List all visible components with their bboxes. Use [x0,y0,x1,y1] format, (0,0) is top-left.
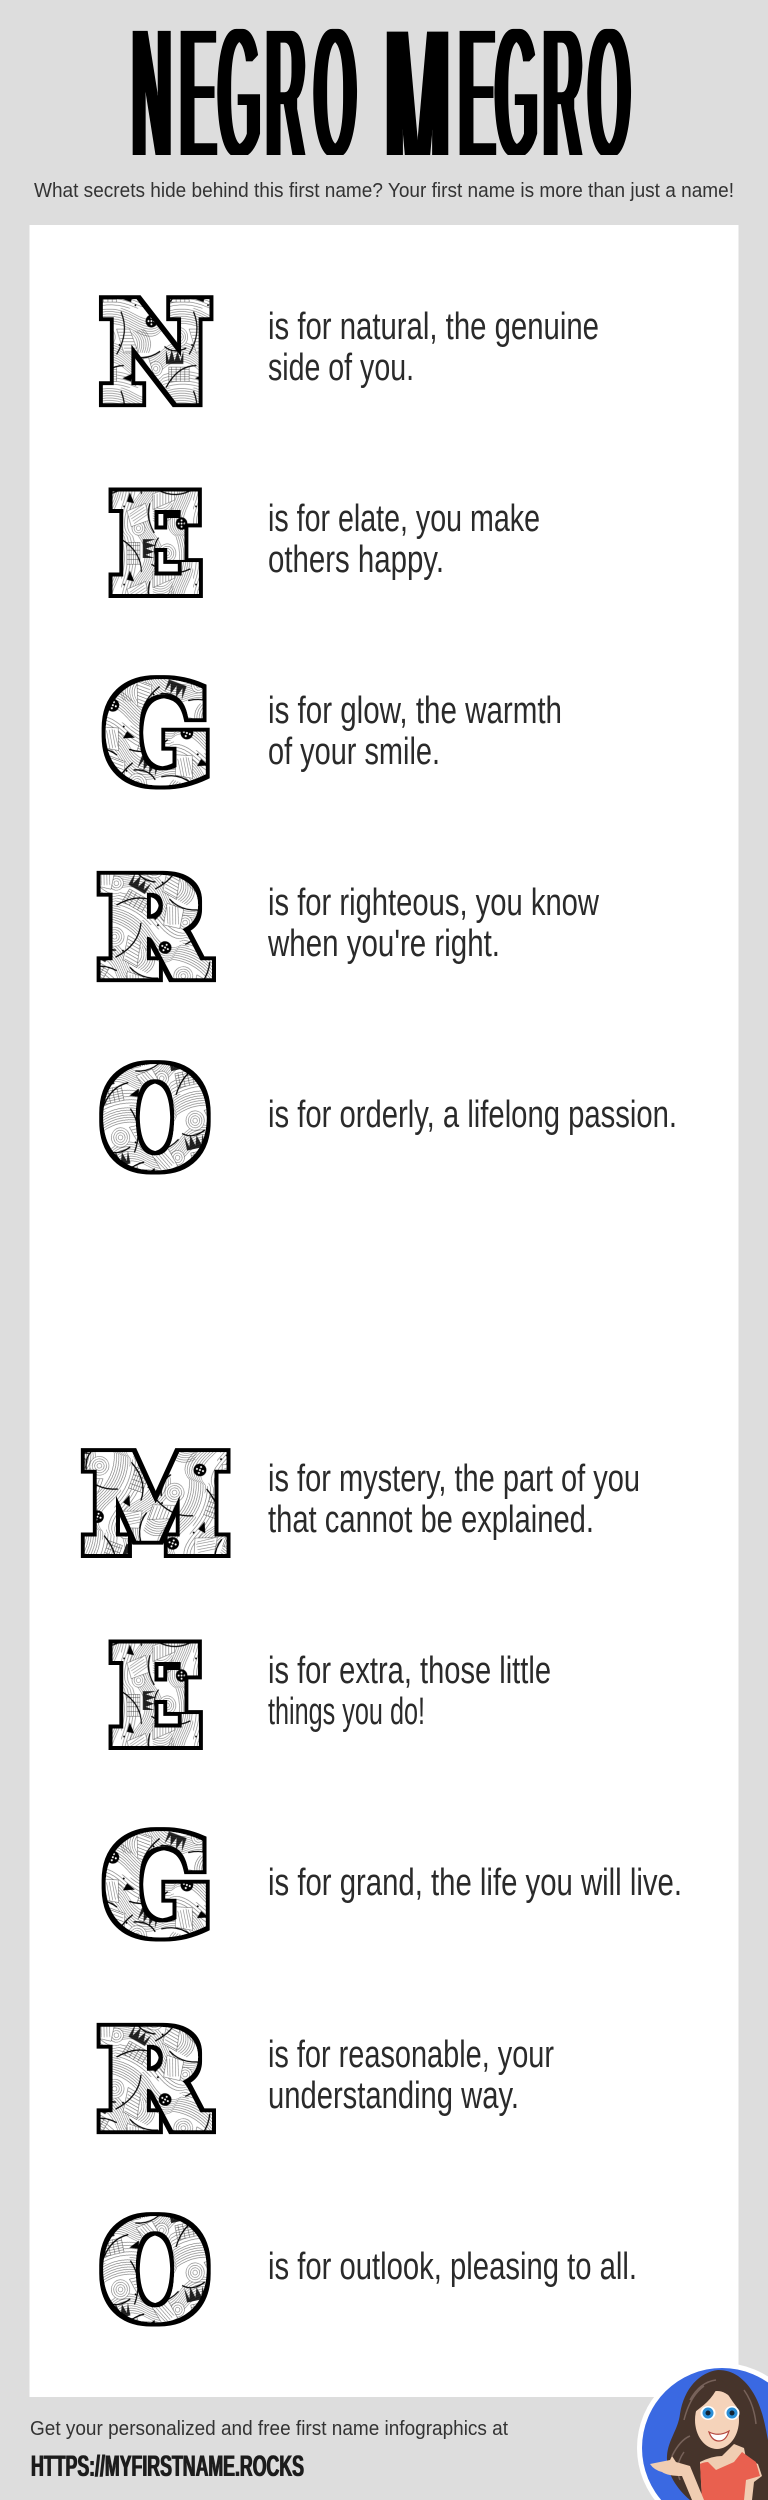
text block: mystery [268,1458,640,1541]
icon: patterned letter R: R [100,2006,207,2156]
text block: elate [268,498,540,581]
text block: righteous: when you're right. [267,923,500,965]
text block: righteous: is for righteous, you know [268,882,599,924]
row: G is for glow [104,658,562,811]
text block: reasonable [268,2034,554,2117]
row: E is for extra [112,1622,551,1771]
text block: reasonable: understanding way. [268,2075,519,2117]
icon: patterned letter G: G [104,1810,212,1963]
row: R is for reasonable [100,2006,554,2156]
text block: glow: is for glow, the warmth [268,690,562,732]
text block: outlook: is for outlook, pleasing to all. [268,2246,637,2288]
text block: righteous [267,882,599,965]
row: E is for elate [112,470,540,619]
footer text: Get your personalized and free first name infographics at [30,2418,508,2440]
text block: extra [268,1650,551,1733]
icon: patterned letter R: R [100,854,207,1004]
text block: extra: is for extra, those little [268,1650,551,1692]
text block: glow [268,690,562,773]
text block: extra: things you do! [268,1691,425,1733]
text block: natural: is for natural, the genuine [268,306,599,348]
avatar: cartoon woman in blue circle [637,2363,768,2500]
text block: natural [268,306,599,389]
row: O is for outlook [101,2194,637,2348]
row: G is for grand [104,1810,682,1963]
text block: mystery: is for mystery, the part of you [268,1458,640,1500]
row: M is for mystery [85,1431,640,1580]
text block: elate: is for elate, you make [268,498,540,540]
subtitle: What secrets hide behind this first name? Your first name is more than just a name! [34,180,734,202]
text block: glow: of your smile. [268,731,440,773]
text block: reasonable: is for reasonable, your [268,2034,554,2076]
row: N is for natural [103,278,599,428]
icon: patterned letter N: N [103,278,209,428]
icon: patterned letter E: E [112,1622,200,1771]
footer url: HTTPS://MYFIRSTNAME.ROCKS [31,2450,304,2483]
icon: patterned letter G: G [104,658,212,811]
icon: patterned letter M: M [85,1431,227,1580]
icon: patterned letter E: E [112,470,200,619]
text block: elate: others happy. [268,539,444,581]
icon: patterned letter O: O [101,1042,209,1196]
text block: mystery: that cannot be explained. [268,1499,594,1541]
row: O is for orderly [101,1042,677,1196]
text block: natural: side of you. [268,347,414,389]
icon: patterned letter O: O [101,2194,209,2348]
row: R is for righteous [100,854,599,1004]
